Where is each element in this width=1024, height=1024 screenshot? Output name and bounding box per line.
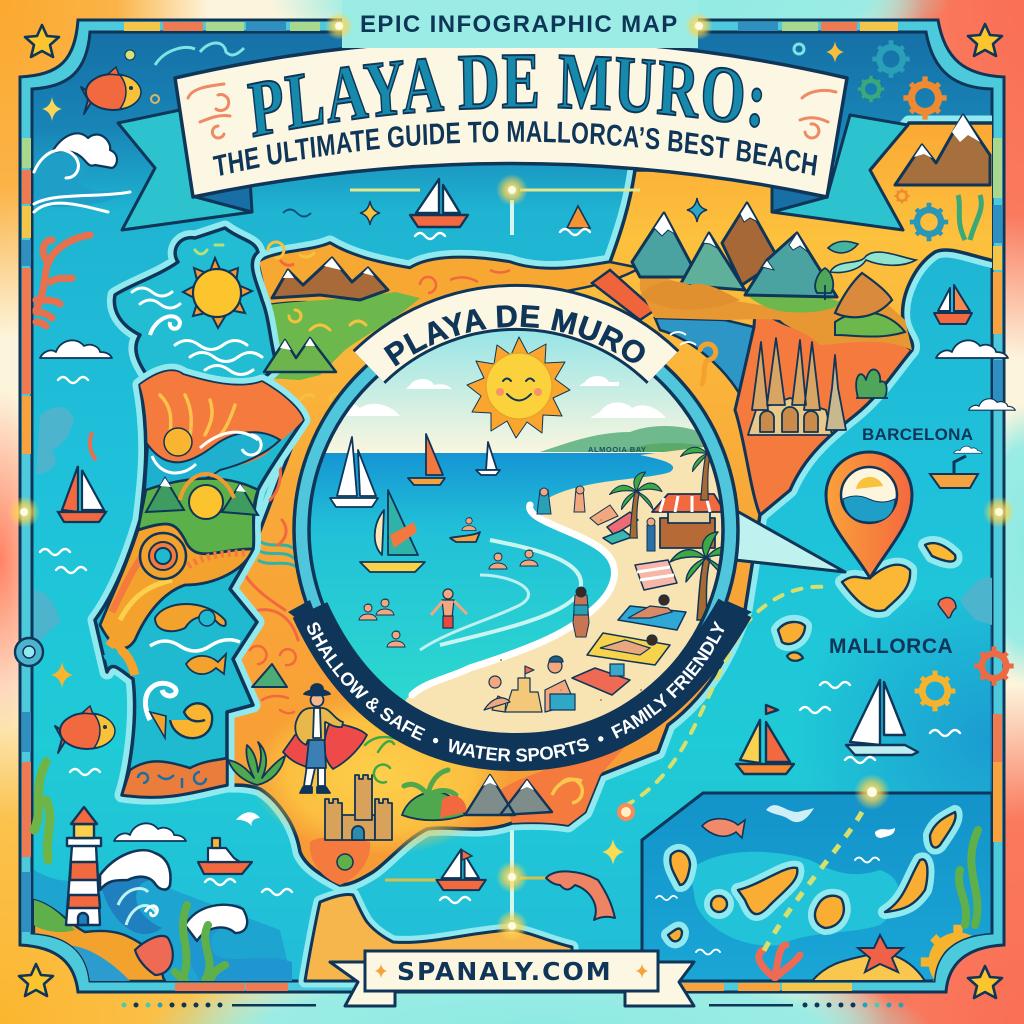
castle: [325, 775, 392, 840]
sand and gear corner: [812, 954, 926, 980]
main title: PLAYA DE MURO:: [246, 54, 762, 138]
hills: [540, 426, 704, 452]
land decoration swirls: [268, 242, 366, 406]
second wave: [180, 904, 292, 981]
pointer beam: [735, 510, 845, 572]
coastal hill: [34, 900, 165, 981]
inset fish: [702, 819, 745, 838]
southern sand spit: [305, 894, 572, 981]
east coral figure: [938, 598, 956, 618]
Canary inset panel: [642, 793, 995, 999]
big wave: [102, 878, 162, 934]
bullfighter: [283, 684, 367, 793]
right clouds: [936, 340, 1008, 358]
gold star top center: [360, 201, 380, 225]
green hills and sunrise: [138, 478, 258, 558]
large white yacht: [846, 680, 918, 755]
corner star: top left: [25, 25, 59, 57]
ornament ring: [34, 590, 60, 640]
beach sand: [385, 440, 760, 770]
left-side wave: [34, 144, 128, 207]
people on sand: [537, 486, 655, 637]
northern mountains: [272, 258, 388, 300]
kelp foreground: [175, 905, 225, 980]
small east boat: [930, 474, 978, 488]
title banner: [173, 47, 849, 199]
cloud: [40, 340, 112, 358]
foam lines: [412, 505, 614, 695]
gold star: [51, 662, 73, 688]
lower-left fish: [55, 706, 115, 753]
beach scene: [310, 330, 722, 733]
sandcastle and kids: [484, 656, 575, 712]
location pin: [826, 452, 912, 578]
corner star: bottom left: [19, 964, 53, 996]
swirl on wave: [145, 906, 157, 916]
lighthouse and big wave scene: [34, 807, 292, 981]
bay label: ALMOOIA BAY: [588, 445, 646, 454]
location lens: [292, 330, 847, 733]
mountain range and trees in northeast: [632, 198, 916, 317]
corner star: bottom right: [968, 966, 1002, 998]
title ribbon tails: [118, 110, 908, 230]
Spanish south flecks: [245, 575, 300, 642]
top-left fish and sparkles: [42, 41, 844, 121]
inset kelp: [959, 830, 978, 925]
Portugal: [95, 371, 303, 797]
south sailboat: [436, 849, 486, 890]
golden curling band: [100, 524, 253, 648]
starfish: [858, 935, 903, 972]
banner flourish left: [188, 84, 230, 138]
Mallorca label: MALLORCA: [829, 635, 953, 658]
northern coast band: [258, 243, 640, 320]
small orange sail: [567, 206, 590, 228]
sailboat west: [58, 466, 106, 522]
kelp top right: [958, 195, 981, 240]
mainland Spain: [227, 123, 1000, 885]
beach hut: [652, 494, 725, 548]
east sea: ships and small marks: [283, 40, 1015, 981]
kelp: [34, 762, 50, 860]
green hills region: [265, 292, 420, 380]
Barcelona label: BARCELONA: [862, 425, 973, 444]
Catalonia region: [735, 310, 912, 515]
pale sea creature: [36, 407, 74, 475]
Galicia sun: [183, 258, 252, 328]
red region beneath the mountains: [592, 270, 655, 320]
Galicia region: [114, 228, 277, 391]
green mountain pair: [264, 338, 336, 372]
footer ribbon: SPANALY.COM: [397, 957, 613, 986]
land masses: [95, 123, 1000, 885]
top-right brown mountains: [895, 115, 990, 185]
header band: EPIC INFOGRAPHIC MAP: [360, 11, 679, 38]
Balearic islands: [778, 543, 955, 661]
palm trees: [610, 472, 662, 538]
towels: [572, 512, 686, 695]
sun with face: [467, 337, 570, 438]
sailboat top center: [410, 179, 468, 227]
main title: [246, 54, 762, 138]
gears east: [872, 40, 910, 78]
red rock: [135, 936, 173, 975]
lens bottom benefits banner: SHALLOW & SAFE • WATER SPORTS • FAMILY FRIENDLY: [307, 620, 724, 762]
yellow spark: [602, 839, 624, 865]
swimmers: [489, 552, 507, 569]
route lines and glow lines: [350, 190, 862, 958]
subtitle: THE ULTIMATE GUIDE TO MALLORCA’S BEST BEACH: [212, 121, 818, 176]
Sagrada Familia landmark: [748, 338, 888, 435]
small green mountain: [252, 664, 287, 687]
grey mountains: [465, 775, 552, 815]
corner star: top right: [968, 24, 1002, 56]
sand specks: [500, 520, 642, 700]
west coast decorations: [15, 133, 130, 860]
blue region beside lens: [655, 318, 754, 393]
lens top label banner: PLAYA DE MURO: [384, 304, 645, 366]
coral creature: [36, 235, 90, 326]
footer ribbon: [330, 951, 694, 1006]
Spanish southern landmarks: [228, 664, 552, 840]
small ship: [198, 838, 252, 874]
green bush and palms: [402, 792, 465, 820]
ocean: [310, 453, 674, 701]
agave plant: [228, 742, 285, 785]
dolphin: [546, 871, 615, 920]
wading figure: [431, 589, 467, 628]
banner flourish right: [800, 90, 836, 138]
bottom decorative dots: [122, 1002, 904, 1008]
lighthouse: [66, 807, 101, 925]
header band: [342, 0, 698, 48]
mid-sea sailboat striped: [736, 705, 794, 774]
coral: [759, 945, 800, 978]
fish and wave art: [155, 604, 226, 631]
Pyrenees foothill band: [640, 278, 912, 350]
right-side boat: [934, 285, 972, 324]
lens top label banner: [352, 284, 680, 384]
sunbathers: [600, 595, 672, 676]
boats in bay: [330, 434, 500, 572]
orange region with sunrise: [140, 371, 303, 471]
